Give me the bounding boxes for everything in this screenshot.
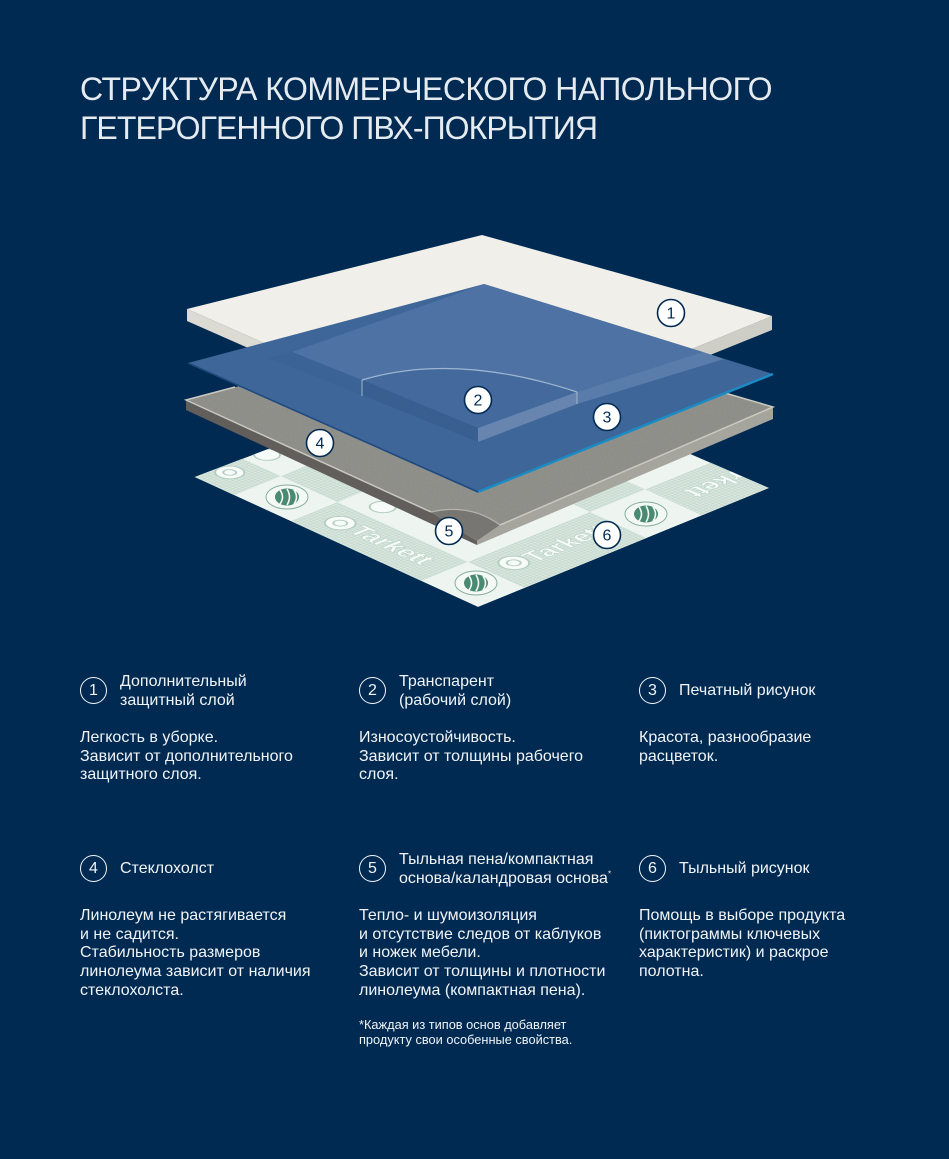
legend item 1: Дополнительный: [120, 672, 247, 690]
marker 4: 4: [316, 436, 325, 452]
legend item 6: Тыльный рисунок: [679, 860, 810, 877]
hatched cells: [194, 458, 769, 588]
legend item 1: 1: [89, 682, 98, 698]
footnote: [359, 1017, 572, 1047]
legend item 4: и не садится.: [80, 926, 179, 943]
marker 3: 3: [603, 410, 612, 426]
legend item 2: Зависит от толщины рабочего: [359, 748, 583, 765]
title: ГЕТЕРОГЕННОГО ПВХ-ПОКРЫТИЯ: [80, 110, 597, 146]
legend item 2: Транспарент: [399, 672, 494, 690]
legend item 6: [639, 855, 846, 980]
legend item 5: основа/каландровая основа*: [399, 870, 611, 887]
legend item 3: Печатный рисунок: [679, 682, 815, 698]
text: стеклохолста.: [80, 982, 184, 999]
footnote: *Каждая из типов основ добавляет: [359, 1017, 566, 1032]
marker 6: [594, 522, 620, 548]
legend item 1: Легкость в уборке.: [80, 729, 218, 746]
Tarkett logotype along right edge: Tarkett: [515, 522, 617, 565]
legend item 5: [359, 851, 611, 999]
legend item 4: Линолеум не растягивается: [80, 907, 286, 924]
legend item 4: Стеклохолст: [120, 860, 214, 877]
legend item 1: защитного слоя.: [80, 766, 202, 783]
print layer edges: [478, 374, 773, 492]
layer 4-5: grey backing and glass fibre: [186, 322, 773, 545]
layer 6: back print mesh: [194, 448, 769, 607]
legend item 5: Тепло- и шумоизоляция: [359, 907, 537, 924]
legend item 2: Износоустойчивость.: [359, 729, 516, 746]
eco logos: [266, 485, 667, 595]
light strip continuing to the right: [577, 352, 724, 404]
marker 6: 6: [603, 528, 612, 544]
legend item 1: защитный слой: [120, 692, 235, 708]
shaded left face of raised wear layer: [362, 380, 478, 442]
legend item 1: [80, 672, 293, 783]
legend item 6: полотна.: [639, 963, 704, 980]
legend item 5: Тыльная пена/компактная: [399, 851, 593, 868]
marker 5: [436, 518, 462, 544]
legend item 5: и ножек мебели.: [359, 944, 481, 961]
legend item 3: Красота, разнообразие: [639, 729, 811, 746]
light right face of raised wear layer: [478, 392, 577, 442]
legend item 4: линолеума зависит от наличия: [80, 963, 311, 980]
marker 1: [658, 300, 684, 326]
legend item 6: характеристик) и раскрое: [639, 944, 828, 961]
cut corner notch: [431, 509, 500, 541]
spirals: [214, 448, 530, 570]
legend item 1: Зависит от дополнительного: [80, 748, 293, 765]
marker 5: 5: [445, 524, 454, 540]
legend item 3: 3: [648, 682, 657, 698]
layers 2-3: transparent wear layer and print: [188, 284, 773, 492]
legend item 6: 6: [648, 860, 657, 876]
upper lighter surface of wear layer: [292, 284, 703, 392]
legend item 2: 2: [368, 682, 377, 698]
title: СТРУКТУРА КОММЕРЧЕСКОГО НАПОЛЬНОГО: [80, 70, 772, 106]
legend item 5: и отсутствие следов от каблуков: [359, 926, 601, 943]
title: [80, 70, 772, 146]
legend item 2: (рабочий слой): [399, 692, 511, 708]
Tarkett logotype upside down: Tarkett: [676, 458, 778, 501]
legend item 5: 5: [368, 860, 377, 876]
text: линолеума (компактная пена).: [359, 982, 585, 999]
legend item 5: Зависит от толщины и плотности: [359, 963, 605, 980]
marker 4: [306, 430, 334, 456]
layer 1: additional protective layer: [187, 235, 772, 449]
legend item 4: 4: [89, 860, 98, 876]
layered floor diagram: [184, 235, 776, 607]
marker 2: 2: [474, 392, 483, 410]
legend item 2: [359, 672, 583, 783]
Tarkett logotype along left edge: Tarkett: [342, 523, 442, 568]
legend item 2: слоя.: [359, 766, 399, 783]
arc cut line: [362, 368, 577, 392]
legend item 4: Стабильность размеров: [80, 944, 260, 961]
shaded left strip of raised wear layer: [268, 352, 362, 395]
surface inside the arc: [362, 368, 577, 428]
legend item 3: расцветок.: [639, 748, 718, 765]
legend item 3: [639, 677, 816, 765]
legend item 4: [80, 855, 311, 999]
marker 2: [464, 386, 492, 414]
marker 3: [594, 404, 620, 430]
legend item 6: (пиктограммы ключевых: [639, 926, 820, 943]
footnote: продукту свои особенные свойства.: [359, 1032, 572, 1047]
legend item 6: Помощь в выборе продукта: [639, 907, 845, 924]
marker 1: 1: [667, 306, 676, 322]
